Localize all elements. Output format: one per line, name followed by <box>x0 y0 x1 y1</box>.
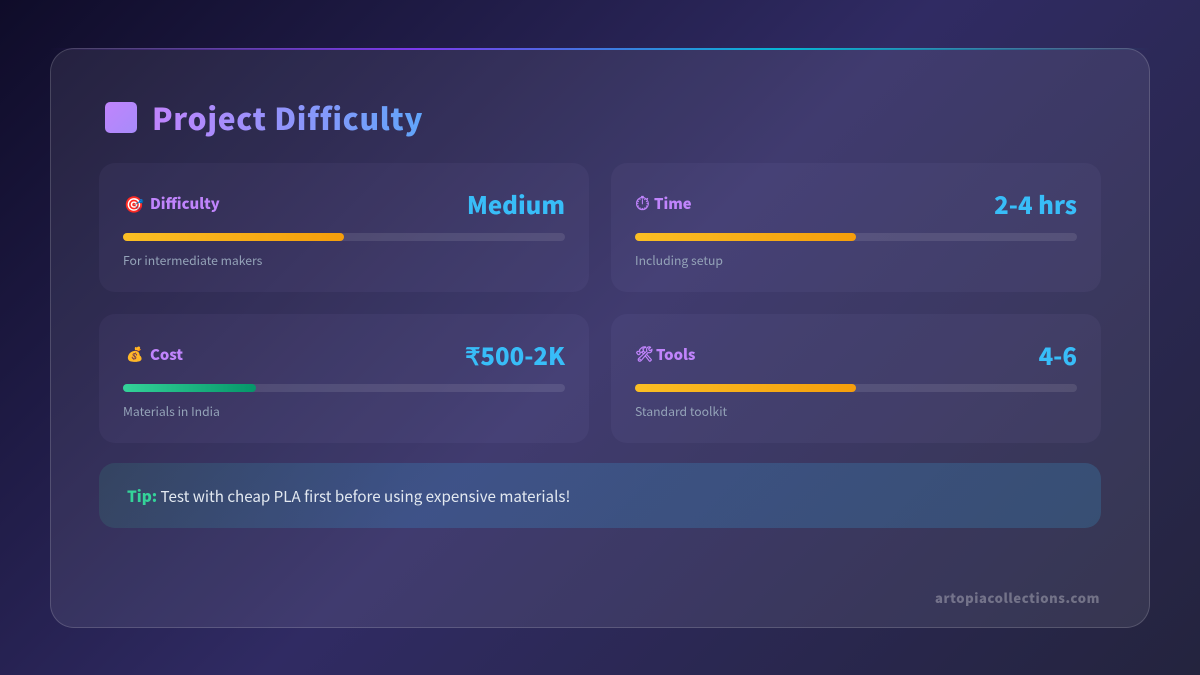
progress bar: cost <box>123 384 565 392</box>
panel: main glass card <box>50 48 1150 628</box>
label: difficulty: Difficulty <box>150 193 220 214</box>
callout: tip: Tip: Test with cheap PLA first before using expensive materials! <box>127 485 570 507</box>
value: cost: ₹500-2K <box>465 337 565 372</box>
label: time: ⏱ <box>635 189 650 216</box>
label: cost: Cost <box>150 344 183 365</box>
panel: difficulty <box>99 163 589 292</box>
note: tools: Standard toolkit <box>635 402 727 420</box>
note: difficulty: For intermediate makers <box>123 251 262 269</box>
label: time: Time <box>654 193 692 214</box>
label: cost: 💰 <box>126 344 143 364</box>
callout: tip <box>99 463 1101 528</box>
progress bar: time <box>635 233 1077 241</box>
title: Project Difficulty <box>152 95 423 139</box>
label: difficulty: 🎯 <box>124 191 144 215</box>
icon: title square <box>105 102 137 133</box>
note: time: Including setup <box>635 251 723 269</box>
panel: tools <box>611 314 1101 443</box>
panel: cost <box>99 314 589 443</box>
top gradient accent line <box>50 48 1150 50</box>
note: cost: Materials in India <box>123 402 220 420</box>
label: time <box>635 189 692 216</box>
value: tools: 4-6 <box>1039 337 1077 372</box>
label: cost <box>126 344 183 365</box>
label: tools <box>635 343 695 365</box>
watermark: artopiacollections.com <box>935 588 1100 607</box>
label: tools: Tools <box>656 344 695 365</box>
value: time: 2-4 hrs <box>994 186 1077 221</box>
label: tools: 🛠 <box>635 343 653 364</box>
panel: time <box>611 163 1101 292</box>
progress bar: difficulty <box>123 233 565 241</box>
label: difficulty <box>124 191 220 215</box>
progress bar: tools <box>635 384 1077 392</box>
value: medium: Medium <box>467 186 565 221</box>
